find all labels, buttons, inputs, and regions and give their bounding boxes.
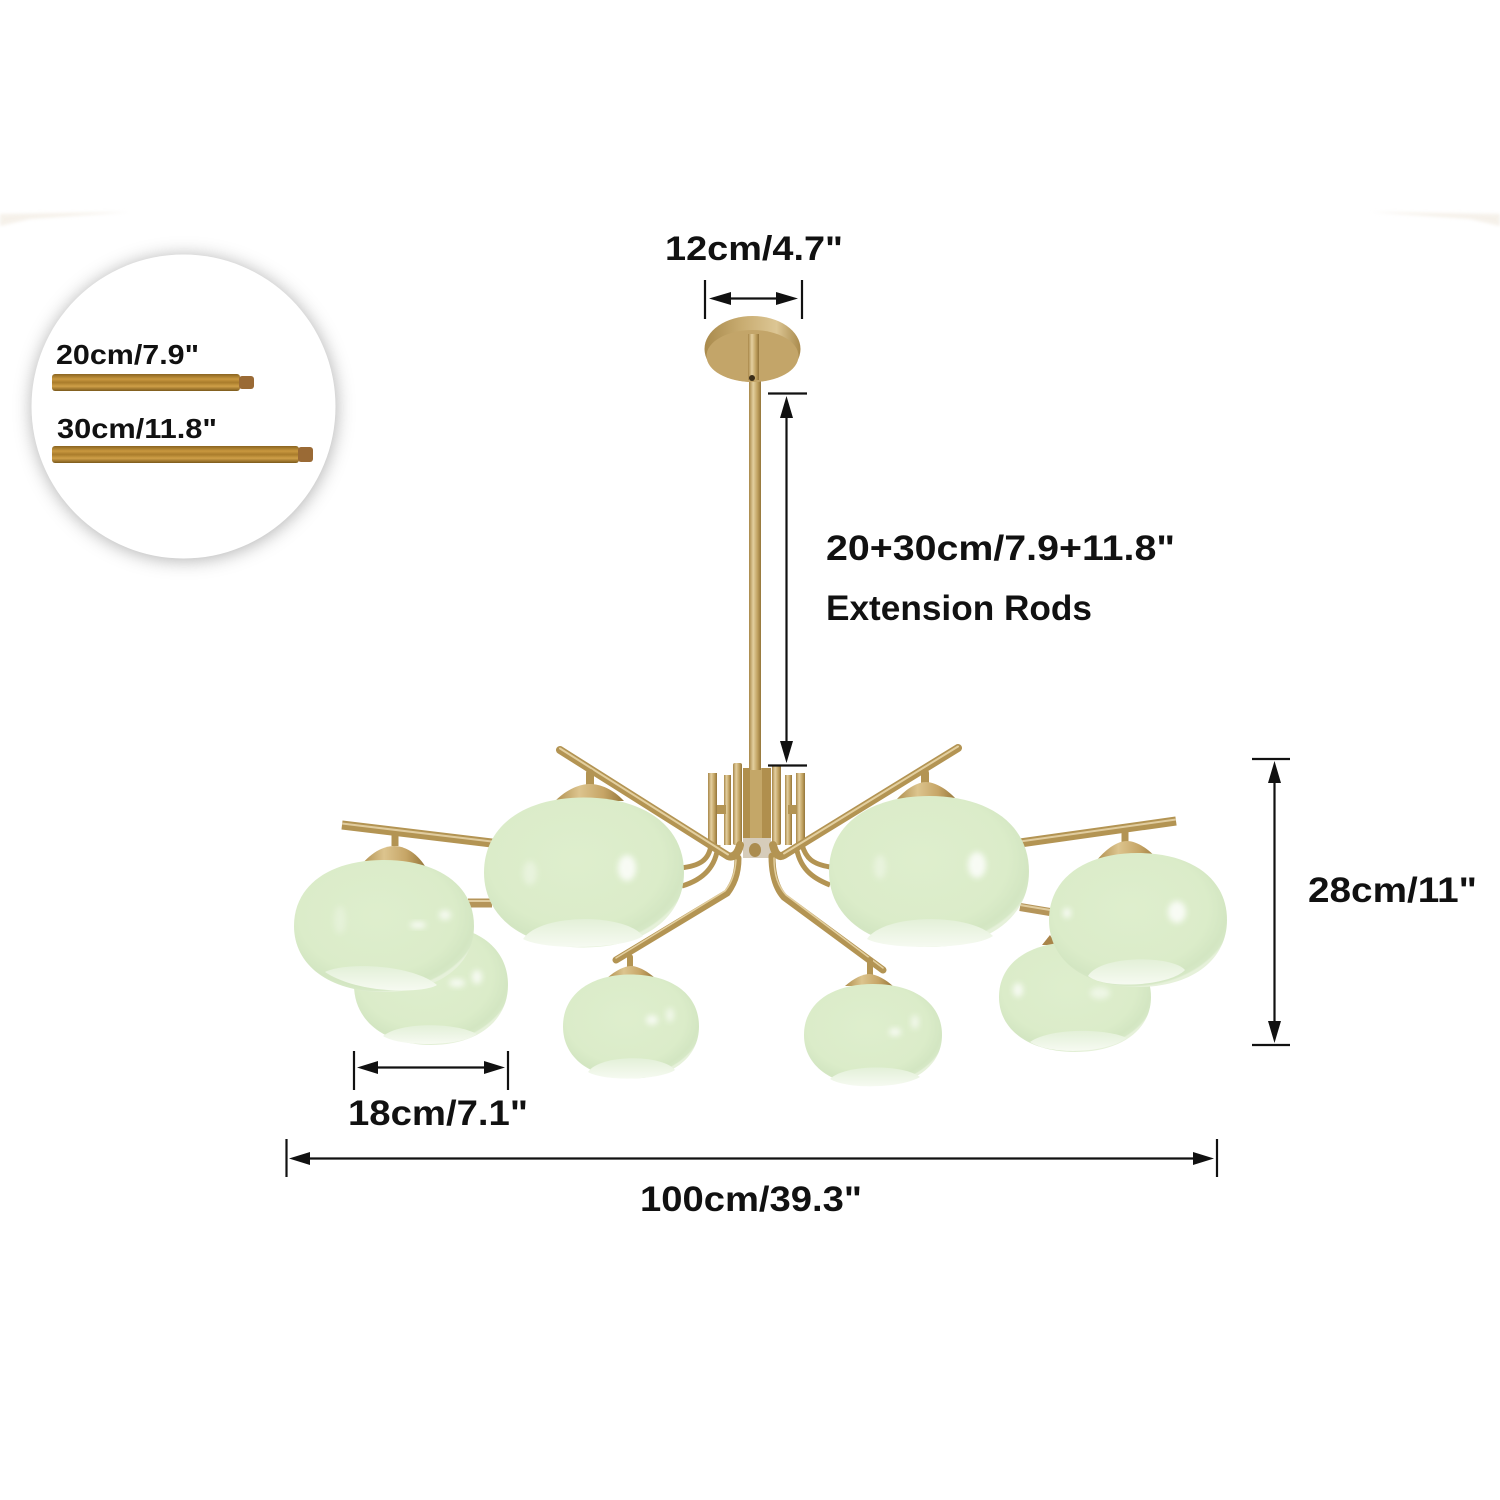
front shade right: [1049, 853, 1227, 987]
dimension: rod length: 20+30cm/7.9+11.8": [826, 529, 1175, 568]
front shade left: [294, 860, 474, 992]
dimension: overall width: 100cm/39.3": [640, 1180, 862, 1219]
dimension: height: [1252, 759, 1477, 1045]
dimension: shade width: [348, 1051, 528, 1133]
label: 20cm rod: 20cm/7.9": [56, 339, 199, 370]
back shade right: [999, 935, 1151, 1052]
rod: 20cm: [52, 374, 254, 391]
dimension: rod length: [768, 394, 1175, 766]
rod: 30cm: [52, 446, 313, 463]
hub: [708, 763, 805, 858]
ceiling canopy: [704, 316, 800, 382]
label: 30cm rod: 30cm/11.8": [57, 413, 217, 444]
dimension: canopy width: [665, 230, 843, 319]
decorative corner smear right: [1370, 212, 1500, 226]
main arms: [560, 746, 958, 975]
chandelier: [294, 316, 1227, 1086]
dimension: overall width: [286, 1139, 1217, 1219]
shade caps: [362, 782, 1158, 986]
far arms: [342, 820, 1176, 846]
lower shade left: [563, 974, 699, 1079]
upper shade right: [829, 796, 1029, 947]
decorative corner smear left: [0, 212, 130, 226]
dimension: rod length: Extension Rods: [826, 589, 1092, 628]
back shade left: [354, 925, 508, 1045]
lower shade right: [804, 984, 942, 1086]
main rod: [749, 378, 761, 770]
dimension: canopy width: 12cm/4.7": [665, 230, 843, 268]
upper shade left: [484, 798, 684, 948]
curved secondary arms: [680, 845, 830, 886]
panel: extension rods inset: [32, 254, 336, 560]
dimension: shade width: 18cm/7.1": [348, 1094, 528, 1133]
arm stubs behind shades: [468, 901, 1050, 912]
dimension: height: 28cm/11": [1308, 871, 1477, 910]
